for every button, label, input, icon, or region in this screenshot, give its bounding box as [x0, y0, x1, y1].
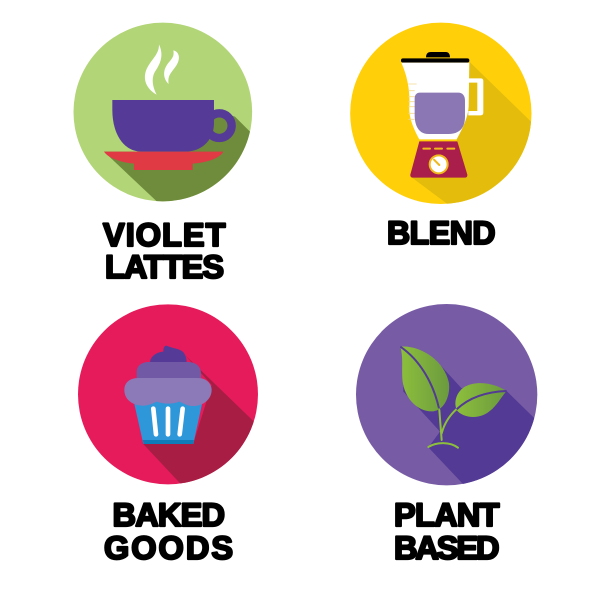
infographic — [74, 22, 538, 560]
label: plant based — [394, 497, 500, 566]
label: plant based: PLANT — [394, 497, 500, 533]
large leaf vein — [400, 347, 439, 408]
icon: blender — [350, 22, 532, 204]
panel: blend — [350, 22, 532, 246]
icon: plant — [356, 304, 538, 486]
top frosting — [150, 346, 187, 363]
purple smoothie — [415, 93, 465, 134]
saucer — [104, 152, 223, 170]
panel: plant based — [356, 304, 538, 560]
label: violet lattes — [103, 217, 226, 285]
measuring marks — [408, 84, 417, 119]
panel: baked goods — [78, 304, 258, 560]
long shadow — [403, 366, 534, 484]
label: blend: BLEND — [387, 215, 496, 251]
long shadow — [142, 356, 254, 484]
jug — [401, 63, 469, 139]
stems — [428, 409, 458, 448]
base — [410, 141, 467, 178]
bottom frosting — [124, 378, 212, 406]
label: plant based: BASED — [394, 530, 500, 566]
small leaf vein — [457, 391, 507, 409]
large leaf — [400, 347, 449, 411]
label: baked goods: BAKED — [112, 497, 225, 533]
lid knob — [426, 52, 450, 57]
long shadow — [412, 62, 531, 204]
label: baked goods: GOODS — [104, 530, 233, 566]
long shadow — [104, 116, 250, 202]
icon: coffee cup — [74, 22, 252, 202]
lid — [401, 58, 469, 63]
small leaf — [455, 383, 507, 417]
dial — [430, 155, 448, 173]
label: violet lattes: LATTES — [105, 249, 224, 285]
icon: cupcake — [78, 304, 258, 484]
handle — [468, 78, 483, 115]
wrapper stripes — [153, 409, 183, 434]
cup body — [112, 100, 214, 152]
steam — [145, 44, 179, 95]
wrapper — [133, 397, 204, 444]
label: baked goods — [104, 497, 233, 566]
panel: violet lattes — [74, 22, 252, 280]
cup handle — [207, 113, 232, 138]
buttons — [423, 146, 454, 152]
wrapper base — [143, 440, 194, 444]
label: violet lattes: VIOLET — [103, 217, 226, 253]
middle frosting — [137, 362, 201, 380]
